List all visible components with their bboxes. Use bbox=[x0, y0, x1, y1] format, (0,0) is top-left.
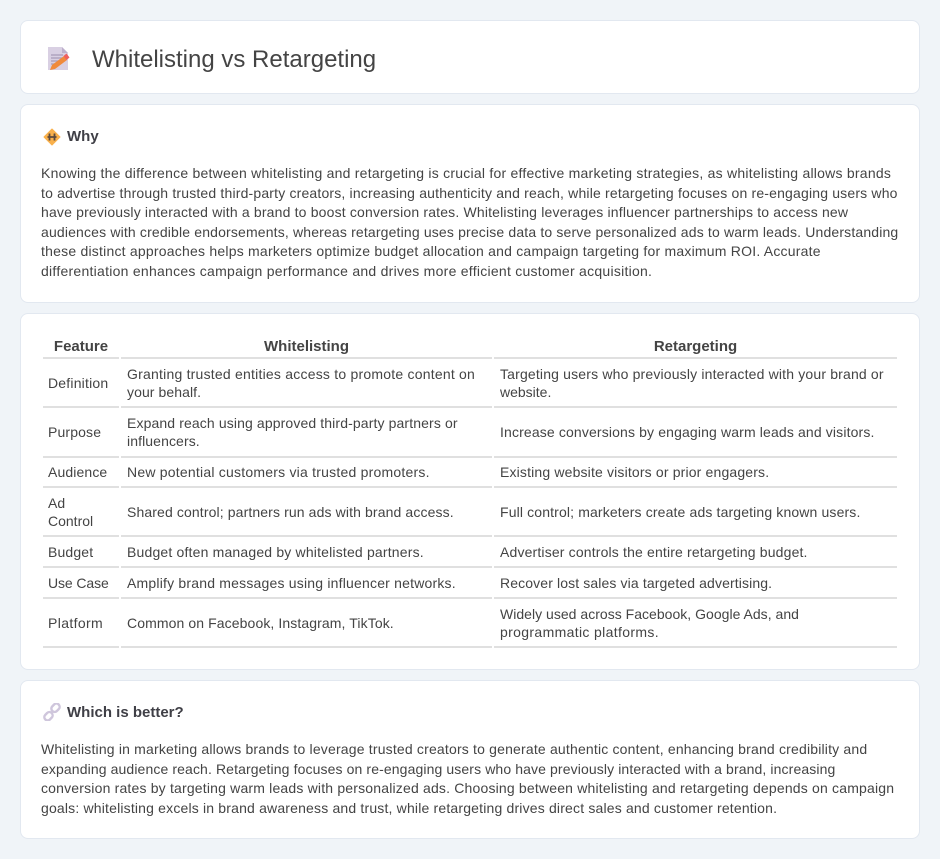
purpose whitelisting: Expand reach using approved third-party partners or bbox=[127, 415, 458, 431]
audience whitelisting: New potential customers via trusted promoters. bbox=[127, 464, 430, 480]
ad control whitelisting: Shared control; partners run ads with brand access. bbox=[127, 504, 454, 520]
use case retargeting: Recover lost sales via targeted advertising. bbox=[500, 575, 772, 591]
panel: which is better bbox=[20, 680, 920, 839]
text: which is better paragraph: conversion rates by targeting warm leads with personalized ads. Choosing between whitelisting and retargeting depends on campaign bbox=[41, 780, 894, 796]
budget whitelisting: Budget often managed by whitelisted partners. bbox=[127, 544, 424, 560]
text: why paragraph bbox=[41, 165, 898, 279]
ad control retargeting: Full control; marketers create ads targeting known users. bbox=[500, 504, 860, 520]
text: why paragraph: to advertise through trusted third-party creators, increasing authenticity and reach, while retargeting focuses on re-engaging users who bbox=[41, 185, 898, 201]
row: platform: Platform bbox=[48, 615, 103, 631]
platform retargeting: Widely used across Facebook, Google Ads, and bbox=[500, 606, 799, 622]
heading: which is better: Which is better? bbox=[67, 704, 184, 721]
text: which is better paragraph: goals: whitelisting excels in brand awareness and trust, while retargeting drives direct sales and customer retention. bbox=[41, 800, 777, 816]
text: why paragraph: differentiation enhances campaign performance and drives more efficient customer acquisition. bbox=[41, 263, 652, 279]
row: budget: Budget bbox=[48, 544, 93, 560]
budget retargeting: Advertiser controls the entire retargeting budget. bbox=[500, 544, 808, 560]
definition whitelisting bbox=[127, 366, 475, 400]
table header: whitelisting bbox=[121, 337, 492, 359]
heading: why: Why bbox=[67, 128, 99, 145]
header panel bbox=[20, 20, 920, 94]
definition whitelisting: your behalf. bbox=[127, 384, 201, 400]
icon: memo and pencil bbox=[48, 47, 70, 70]
table header: feature bbox=[43, 337, 119, 359]
definition retargeting: website. bbox=[500, 384, 551, 400]
purpose whitelisting bbox=[127, 415, 458, 449]
definition whitelisting: Granting trusted entities access to promote content on bbox=[127, 366, 475, 382]
row: ad control bbox=[48, 495, 93, 529]
row: use case: Use Case bbox=[48, 575, 109, 591]
definition retargeting: Targeting users who previously interacted with your brand or bbox=[500, 366, 884, 382]
row: purpose: Purpose bbox=[48, 424, 101, 440]
text: why paragraph: audiences with credible endorsements, whereas retargeting uses precise data to serve personalized ads to warm leads. Understanding bbox=[41, 224, 898, 240]
panel: why bbox=[20, 104, 920, 303]
row: ad control: Control bbox=[48, 513, 93, 529]
title: Whitelisting vs Retargeting bbox=[92, 46, 376, 73]
use case whitelisting: Amplify brand messages using influencer networks. bbox=[127, 575, 456, 591]
text: which is better paragraph: expanding audience reach. Retargeting focuses on re-engaging users who have previously interacted with a brand, increasing bbox=[41, 761, 835, 777]
definition retargeting bbox=[500, 366, 884, 400]
platform whitelisting: Common on Facebook, Instagram, TikTok. bbox=[127, 615, 394, 631]
purpose retargeting: Increase conversions by engaging warm leads and visitors. bbox=[500, 424, 875, 440]
table header: feature: Feature bbox=[54, 338, 108, 355]
text: which is better paragraph bbox=[41, 741, 894, 816]
row: definition: Definition bbox=[48, 375, 108, 391]
purpose whitelisting: influencers. bbox=[127, 433, 200, 449]
audience retargeting: Existing website visitors or prior engagers. bbox=[500, 464, 769, 480]
text: why paragraph: have previously interacted with a brand to boost conversion rates. Whitelisting leverages influencer partnerships to access new bbox=[41, 204, 848, 220]
icon: diamond sign bbox=[44, 128, 60, 146]
text: why paragraph: these distinct approaches helps marketers optimize budget allocation and campaign targeting for maximum ROI. Accurate bbox=[41, 243, 821, 259]
row: audience: Audience bbox=[48, 464, 107, 480]
text: why paragraph: Knowing the difference between whitelisting and retargeting is crucial for effective marketing strategies, as whitelisting allows brands bbox=[41, 165, 891, 181]
icon: link bbox=[43, 703, 61, 721]
text: which is better paragraph: Whitelisting in marketing allows brands to leverage trusted creators to generate authentic content, enhancing brand credibility and bbox=[41, 741, 867, 757]
table header: retargeting: Retargeting bbox=[654, 338, 737, 355]
platform retargeting: programmatic platforms. bbox=[500, 624, 659, 640]
platform retargeting bbox=[500, 606, 799, 640]
table header: retargeting bbox=[494, 337, 897, 359]
row: ad control: Ad bbox=[48, 495, 65, 511]
panel: comparison table bbox=[20, 313, 920, 670]
table header: whitelisting: Whitelisting bbox=[264, 338, 349, 355]
